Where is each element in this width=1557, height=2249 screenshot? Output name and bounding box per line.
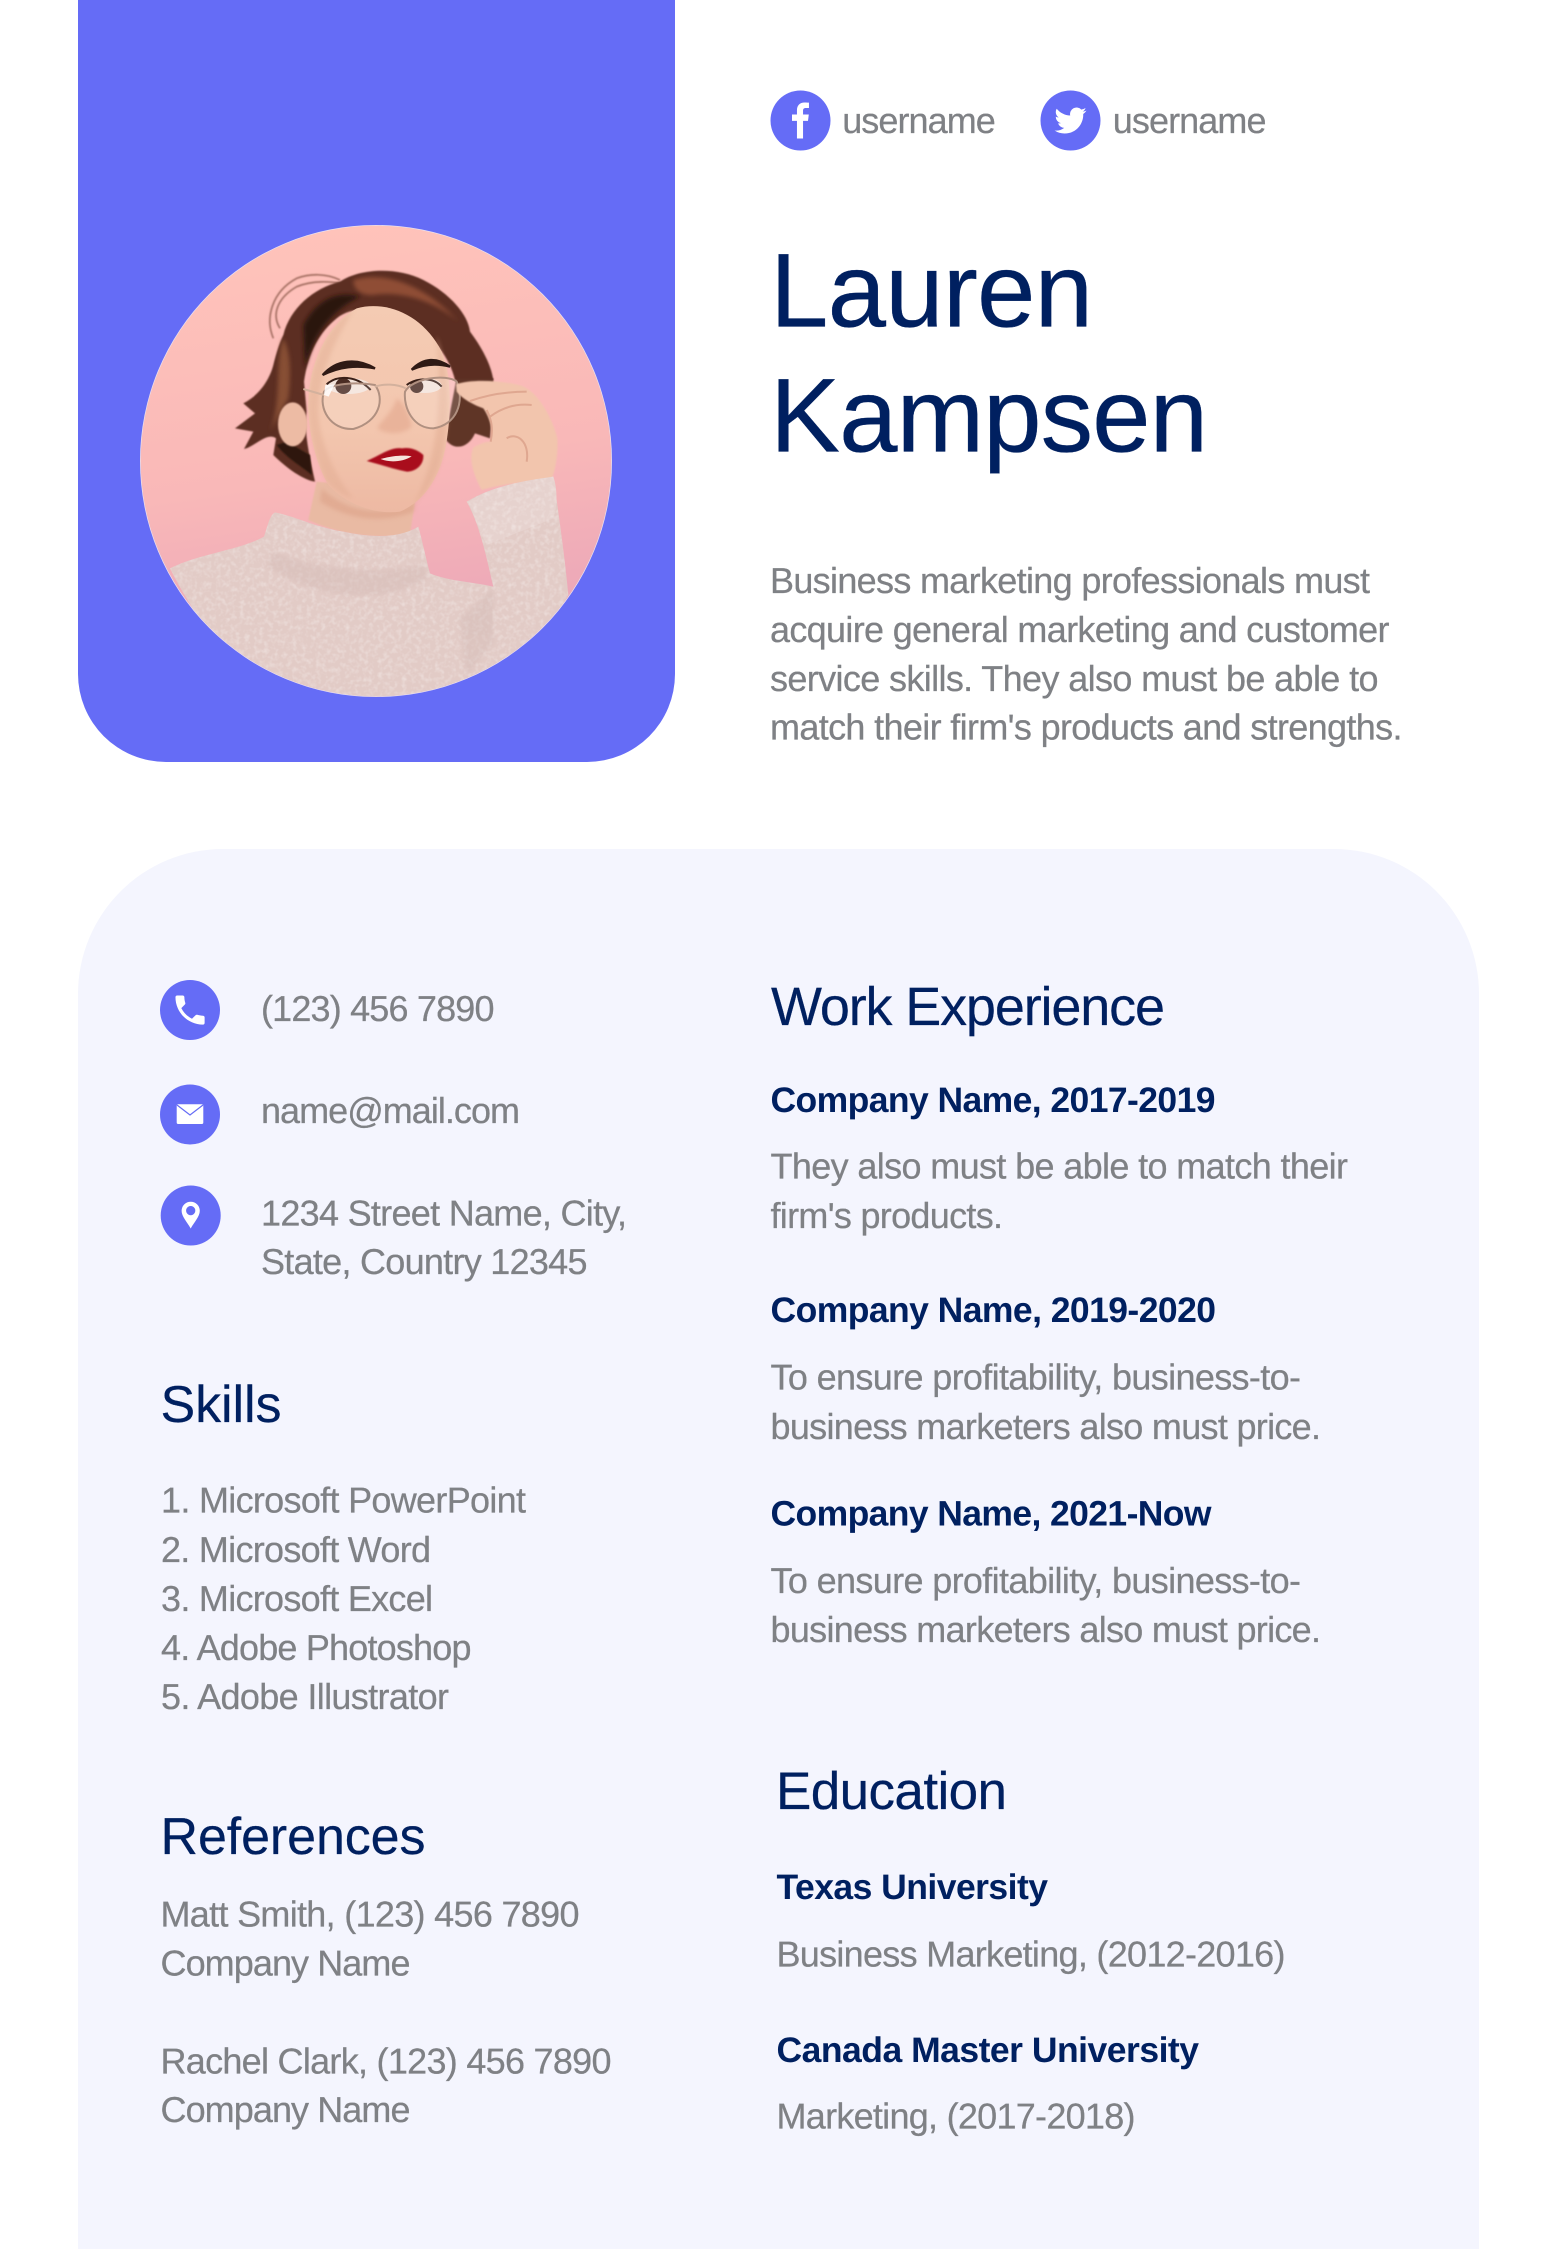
- address lines: 1234 Street Name, City,: [261, 1192, 627, 1233]
- text block: summary: service skills. They also must be able to: [770, 658, 1378, 699]
- job 1: firm's products.: [770, 1195, 1003, 1236]
- skills list: 2. Microsoft Word: [161, 1529, 431, 1570]
- icon: map pin: [182, 1202, 200, 1228]
- panel: resume content background: [78, 849, 1479, 2249]
- section: references: [160, 1808, 612, 2130]
- back hair: [445, 378, 493, 447]
- title: name: Lauren: [770, 232, 1093, 349]
- icon: envelope: [177, 1104, 203, 1124]
- skills list: 4. Adobe Photoshop: [161, 1627, 472, 1668]
- social: twitter: [1040, 90, 1266, 150]
- degree 2: Marketing, (2017-2018): [776, 2096, 1136, 2137]
- reference 2: Rachel Clark, (123) 456 7890: [160, 2041, 612, 2082]
- contact: address: State, Country 12345: [261, 1241, 588, 1282]
- contact: address: [161, 1186, 627, 1282]
- icon: phone: [175, 995, 205, 1025]
- facebook username: username: [842, 100, 996, 141]
- loose hair strands: [270, 275, 343, 338]
- degree 2: [776, 2030, 1199, 2137]
- phone number: (123) 456 7890: [261, 988, 494, 1029]
- degree 2: Canada Master University: [776, 2030, 1199, 2070]
- degree 1: [776, 1867, 1286, 1974]
- title: name: [770, 232, 1208, 474]
- job 3: Company Name, 2021-Now: [770, 1494, 1212, 1534]
- lips: [367, 448, 423, 472]
- skills list: 3. Microsoft Excel: [161, 1578, 433, 1619]
- panel: profile photo card: [78, 0, 675, 762]
- degree 1: Business Marketing, (2012-2016): [776, 1933, 1286, 1974]
- job 3: [770, 1494, 1321, 1650]
- email address: name@mail.com: [261, 1090, 520, 1131]
- text block: summary: match their firm's products and strengths.: [770, 706, 1402, 748]
- job 3: business marketers also must price.: [770, 1609, 1321, 1650]
- job 1: Company Name, 2017-2019: [770, 1080, 1216, 1120]
- twitter username: username: [1113, 100, 1266, 141]
- job 1: [770, 1080, 1348, 1236]
- section: education: [776, 1762, 1286, 2137]
- heading: work experience: Work Experience: [771, 977, 1165, 1037]
- ear: [278, 402, 307, 446]
- reference 2: Company Name: [160, 2089, 410, 2130]
- job 3: To ensure profitability, business-to-: [770, 1560, 1301, 1601]
- text block: summary: [770, 560, 1402, 748]
- job 2: Company Name, 2019-2020: [770, 1290, 1216, 1330]
- section: skills: [160, 1376, 526, 1717]
- icon: twitter bird: [1054, 107, 1086, 133]
- text block: summary: Business marketing professionals must: [770, 560, 1370, 601]
- job 2: business marketers also must price.: [770, 1406, 1321, 1447]
- hair main: [235, 271, 493, 482]
- hand: [456, 381, 558, 490]
- skills list: 1. Microsoft PowerPoint: [161, 1480, 526, 1521]
- skills list: 5. Adobe Illustrator: [161, 1676, 449, 1717]
- cuff: [498, 476, 556, 498]
- reference 1: Matt Smith, (123) 456 7890: [160, 1893, 580, 1934]
- nose shadow: [377, 398, 412, 433]
- contact: email: [160, 1084, 520, 1144]
- sweater: [170, 477, 568, 705]
- degree 1: Texas University: [776, 1867, 1048, 1907]
- eyebrows: [323, 362, 375, 375]
- icon: facebook f: [792, 102, 809, 138]
- title: name: Kampsen: [770, 357, 1208, 474]
- section: work experience: [770, 977, 1348, 1650]
- glasses: [323, 378, 460, 429]
- social: facebook: [770, 90, 996, 150]
- job 2: To ensure profitability, business-to-: [770, 1357, 1301, 1398]
- reference 1: [160, 1893, 580, 1983]
- heading: skills: Skills: [160, 1376, 282, 1434]
- eyes: [326, 378, 370, 394]
- neck: [308, 482, 417, 536]
- heading: education: Education: [776, 1762, 1007, 1821]
- reference 2: [160, 2041, 612, 2130]
- reference 1: Company Name: [160, 1942, 410, 1983]
- photo: portrait of woman with glasses: [140, 225, 620, 705]
- face: [308, 306, 450, 512]
- text block: summary: acquire general marketing and customer: [770, 609, 1390, 650]
- job 1: They also must be able to match their: [770, 1145, 1348, 1186]
- job 2: [770, 1290, 1321, 1447]
- skills list: [161, 1480, 526, 1717]
- contact: phone: [160, 980, 494, 1040]
- heading: references: References: [160, 1808, 426, 1866]
